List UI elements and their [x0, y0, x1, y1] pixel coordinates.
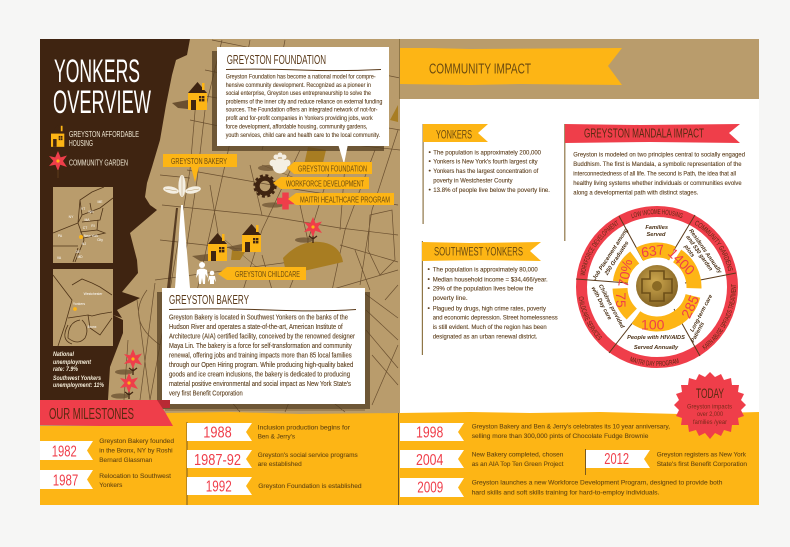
heading: GREYSTON BAKERY	[169, 292, 249, 307]
fact list: •	[428, 267, 430, 274]
panel: Yonkers facts	[422, 124, 550, 224]
segment dividers	[576, 215, 736, 356]
banner: Community Impact	[400, 48, 622, 85]
fact list: •	[428, 159, 432, 166]
milestone: 2009: 2009	[417, 480, 443, 497]
segment descriptions: 250 Graduates	[603, 240, 630, 277]
segment descriptions	[590, 225, 723, 351]
body text: force development, affordable housing, community gardens,	[226, 123, 367, 130]
milestone: 2009	[400, 478, 723, 497]
title: YONKERS	[54, 53, 140, 89]
inset map: northeast states: CT	[83, 226, 87, 230]
milestone: 1998	[400, 423, 670, 442]
body text: Greyston Bakery is located in Southwest Yonkers on the banks of the	[169, 312, 348, 321]
milestone: 1987: Relocation to Southwest	[99, 473, 171, 480]
milestone: 2012	[585, 449, 747, 475]
mandala description: Buddhism. The first is Mandala, a symbolic representation of the	[573, 161, 742, 168]
segment descriptions: Served Annually	[634, 345, 679, 351]
ring labels: LOW INCOME HOUSING	[630, 209, 683, 218]
fact list: poverty line.	[433, 295, 468, 302]
milestone: 1988: Ben & Jerry's	[258, 434, 296, 441]
inset map: northeast states	[53, 187, 113, 263]
title: OVERVIEW	[53, 84, 151, 120]
mandala description: along a developmental path with distinct stages.	[573, 189, 698, 196]
milestone: 1982: 1982	[52, 444, 77, 461]
panel: right page white	[399, 39, 759, 505]
unemployment stats	[53, 351, 104, 389]
body text: material positive environmental and social impact as New York State's	[169, 379, 351, 388]
panel: Greyston Mandala Impact: GREYSTON MANDALA IMPACT	[584, 126, 704, 140]
ring labels: CHILDCARE SERVICES	[578, 296, 602, 340]
legend text: garden: COMMUNITY GARDEN	[69, 158, 128, 168]
icon: workforce gear	[254, 176, 276, 196]
fact list	[428, 267, 558, 340]
milestone: 1988: 1988	[203, 425, 232, 442]
milestone: 1992	[187, 477, 362, 496]
panel: Greyston Mandala Impact	[564, 124, 745, 241]
icon: affordable housing pair	[192, 224, 261, 261]
milestone: 1987-92	[187, 450, 358, 469]
ring labels: MAITRI DAY PROGRAM	[630, 356, 679, 366]
milestone: 1982: Greyston Bakery founded	[99, 438, 174, 445]
segment descriptions: Patients	[690, 321, 706, 344]
milestone: 1987-92: are established	[258, 461, 302, 468]
segment descriptions: and 530 garden	[684, 235, 714, 273]
label: Workforce Development	[273, 177, 369, 189]
fact list: Median household income = $34,466/year.	[433, 276, 548, 283]
unemployment stats: unemployment: 11%	[53, 382, 104, 389]
mandala description: healthy living systems whether individuals or communities evolve	[573, 180, 742, 187]
ring labels	[578, 209, 736, 366]
icon: community garden flower on hill	[295, 217, 322, 243]
inset map: northeast states: PA	[58, 234, 63, 238]
segment descriptions: People with HIV/AIDS	[627, 335, 685, 341]
ring values: 100	[641, 316, 665, 332]
label: Greyston Foundation tag: GREYSTON FOUNDATION	[298, 164, 367, 174]
body text: hensive community development. Recognized as a pioneer in	[226, 82, 371, 89]
golden map blocks	[231, 105, 398, 273]
ring values: 285	[678, 293, 702, 321]
milestone: 1988	[187, 423, 351, 442]
ring values	[613, 241, 702, 332]
yellow value ribbons	[605, 235, 709, 339]
inset map: northeast states: VA	[57, 256, 62, 260]
ring labels: KARN ABUSE SPF/AIDS TREATMENT	[702, 284, 736, 350]
label: Workforce Development: WORKFORCE DEVELOPMENT	[286, 178, 364, 188]
icon: legend flower	[49, 151, 67, 178]
milestone: 1987: 1987	[53, 473, 78, 490]
fact list: Yonkers is New York's fourth largest city	[433, 159, 538, 166]
legend text: housing: GREYSTON AFFORDABLE	[69, 129, 139, 139]
unemployment stats: Southwest Yonkers	[53, 375, 101, 382]
body text: through our Open Hiring program. While producing high-quality baked	[169, 360, 353, 369]
milestone: 2004	[400, 450, 564, 469]
inset map: northeast states: ME	[97, 200, 103, 204]
callout: today starburst: over 2,000	[697, 411, 723, 418]
fact list: poverty in Westchester County	[433, 178, 513, 185]
fact list: Plagued by drugs, high crime rates, poverty	[433, 305, 547, 312]
body text	[169, 312, 355, 397]
segment descriptions: Children provided	[597, 284, 625, 330]
segment descriptions: with Day care	[590, 286, 612, 321]
milestone: 2012: 2012	[604, 451, 629, 468]
legend text: housing	[69, 129, 139, 148]
title	[53, 53, 151, 120]
label: Greyston Foundation tag	[287, 162, 372, 174]
segment descriptions: Residents Annually	[687, 228, 723, 275]
icon: garden flowers by river	[111, 349, 142, 399]
inset map: northeast states: City	[97, 238, 103, 242]
mandala description: interconnectedness of all life. The second is Path, the idea that all	[573, 170, 736, 177]
body text: problems of the inner city and reduce reliance on external funding	[226, 98, 383, 105]
label: Greyston Childcare	[218, 267, 306, 280]
inset map: Westchester and Yonkers: Yonkers	[73, 302, 85, 306]
callout: today starburst: families /year	[693, 419, 728, 426]
icon: healthcare cross	[262, 192, 294, 210]
inset map: northeast states: NH	[89, 210, 94, 214]
inset map: Westchester and Yonkers	[53, 269, 113, 346]
segment descriptions: Long-term care	[689, 294, 714, 333]
mandala description: Greyston is modeled on two principles central to socially engaged	[573, 151, 745, 158]
milestone: 2012: Greyston registers as New York	[657, 451, 747, 458]
milestone: 1998: selling more than 300,000 pints of Chocolate Fudge Brownie	[472, 433, 649, 440]
inset map: northeast states: MA	[84, 218, 90, 222]
milestone: 1998: 1998	[416, 425, 443, 442]
milestone: 1982	[40, 438, 174, 464]
milestone: 1992: Greyston Foundation is established	[258, 483, 362, 490]
map streets	[124, 40, 400, 412]
fact list: •	[428, 149, 432, 156]
body text: profit and for-profit companies in Yonkers providing jobs, work	[226, 115, 373, 122]
inset map: Westchester and Yonkers: Bronx	[88, 325, 97, 329]
fact list: Yonkers has the largest concentration of	[433, 168, 538, 175]
heading: GREYSTON FOUNDATION	[227, 53, 326, 67]
body text: youth services, child care and health care to the local community.	[226, 132, 380, 139]
fact list: •	[428, 187, 432, 194]
body text	[226, 74, 383, 139]
legend text: housing: HOUSING	[69, 138, 93, 148]
panel: Southwest Yonkers facts	[422, 241, 558, 355]
fact list: •	[428, 286, 430, 293]
segment descriptions: Job Placement among	[592, 227, 630, 281]
panel: Yonkers facts: YONKERS	[436, 127, 472, 141]
panel: left map background	[40, 39, 400, 505]
body text: Maya Lin. The bakery is a force for self-transformation and community	[169, 341, 352, 350]
fact list: and economic depression. Street homelessness	[433, 314, 558, 321]
inset map: northeast states: NY	[69, 215, 74, 219]
milestone: 2004: 2004	[416, 452, 443, 469]
label: Greyston Childcare: GREYSTON CHILDCARE	[235, 269, 300, 279]
ring values: 1400	[665, 245, 698, 278]
segment descriptions: plots	[682, 243, 695, 259]
body text: sources. The Foundation offers an integrated network of not-for-	[226, 107, 377, 114]
panel: milestones yellow band right	[400, 412, 759, 505]
fact list	[428, 149, 550, 194]
milestone: 1992: 1992	[206, 479, 232, 496]
milestone: 2004: New Bakery completed, chosen	[472, 451, 564, 458]
milestone: 2009: Greyston launches a new Workforce Development Program, designed to provide both	[472, 480, 723, 487]
milestone: 1982: in the Bronx, NY by Roshi	[99, 448, 173, 454]
mandala description	[573, 151, 745, 196]
body text: social enterprise, Greyston uses entrepreneurship to solve the	[226, 90, 371, 97]
fact list: •	[428, 276, 430, 283]
milestone: 2009: hard skills and soft skills training for hard-to-employ individuals.	[472, 489, 659, 496]
inset map: northeast states: RI	[91, 224, 95, 228]
body text: Greyston Foundation has become a national model for compre-	[226, 74, 376, 80]
heading ribbon: Our Milestones: OUR MILESTONES	[49, 406, 134, 423]
panel: Southwest Yonkers facts: SOUTHWEST YONKERS	[434, 245, 523, 259]
label: Greyston Bakery: GREYSTON BAKERY	[171, 156, 227, 166]
inset map: northeast states: DE	[76, 250, 81, 254]
medallion	[636, 265, 678, 307]
body text: Hudson River and operates a state-of-the-art, American Institute of	[169, 322, 343, 331]
milestone: 1987-92: 1987-92	[194, 452, 241, 469]
fact list: •	[428, 168, 432, 175]
icon: parent and child	[196, 262, 216, 284]
fact list: is still evident. Much of the region has been	[433, 324, 547, 331]
ring labels: COMMUNITY GARDENS	[695, 220, 733, 271]
fact list: 29% of the population lives below the	[433, 286, 534, 293]
ring values: 75	[613, 292, 629, 308]
banner: Community Impact: COMMUNITY IMPACT	[429, 60, 531, 77]
ring labels: WORKFORCE DEVELOPMENT	[580, 220, 618, 276]
milestone: 1987: Yonkers	[99, 482, 123, 489]
panel: Greyston Foundation	[212, 47, 389, 164]
fact list: The population is approximately 80,000	[433, 267, 538, 274]
milestone: 1982: Bernard Glassman	[99, 457, 152, 464]
unemployment stats: rate: 7.9%	[53, 366, 78, 373]
legend	[49, 125, 139, 178]
milestone: 1987	[40, 470, 171, 490]
fact list: designated as an urban renewal district.	[433, 333, 537, 340]
milestone: 2004: as an AIA Top Ten Green Project	[472, 461, 563, 468]
inset map: northeast states: MD	[77, 255, 83, 259]
callout: today starburst: Greyston impacts	[687, 404, 733, 410]
inset map: northeast states: NJ	[82, 242, 86, 246]
unemployment stats: National	[53, 351, 74, 358]
milestone: 1998: Greyston Bakery and Ben & Jerry's celebrates its 10 year anniversary,	[472, 424, 670, 431]
unemployment stats: unemployment	[53, 359, 92, 366]
body text: renewal, offering jobs and training impacts more than 85 local families	[169, 350, 352, 359]
milestone: 1987-92: Greyston's social service programs	[258, 452, 358, 459]
icon: foundation lotus	[258, 152, 290, 174]
label: Greyston Bakery	[163, 154, 237, 182]
fact list: 13.8% of people live below the poverty line.	[433, 187, 550, 194]
milestone: 1988: Inclusion production begins for	[258, 424, 351, 431]
label: Maitri Healthcare Program	[288, 193, 394, 205]
body text: goods and ice cream inclusions, the bakery is dedicated to producing	[169, 369, 350, 378]
inset map: Westchester and Yonkers: Westchester	[84, 292, 103, 296]
callout: today starburst: TODAY	[696, 385, 724, 401]
segment descriptions: Families	[645, 225, 668, 231]
body text: very first Benefit Corporation	[169, 388, 243, 397]
milestone: 2012: State's first Benefit Corporation	[657, 461, 747, 468]
heading ribbon: Our Milestones	[40, 400, 173, 426]
icon: wheat and pointer	[162, 175, 202, 288]
label: Maitri Healthcare Program: MAITRI HEALTHCARE PROGRAM	[300, 194, 390, 204]
ring values: 637	[640, 241, 666, 260]
icon: housing on upper map	[172, 82, 207, 110]
body text: Architecture (AIA) certified facility, conceived by the renowned designer	[169, 331, 355, 340]
icon: legend housing	[51, 125, 64, 147]
ring values: 70%	[615, 258, 635, 288]
callout: today starburst	[674, 372, 746, 439]
fact list: The population is approximately 200,000	[433, 149, 541, 156]
chart: mandala wheel	[576, 206, 738, 368]
panel: Greyston Bakery	[157, 288, 370, 409]
fact list: •	[428, 305, 430, 312]
inset map: northeast states: New York	[84, 234, 98, 238]
panel: dark river area	[40, 39, 190, 400]
panel: milestones yellow band left	[40, 412, 400, 505]
inset map: northeast states: VT	[81, 207, 85, 211]
segment descriptions: Served	[647, 232, 666, 238]
